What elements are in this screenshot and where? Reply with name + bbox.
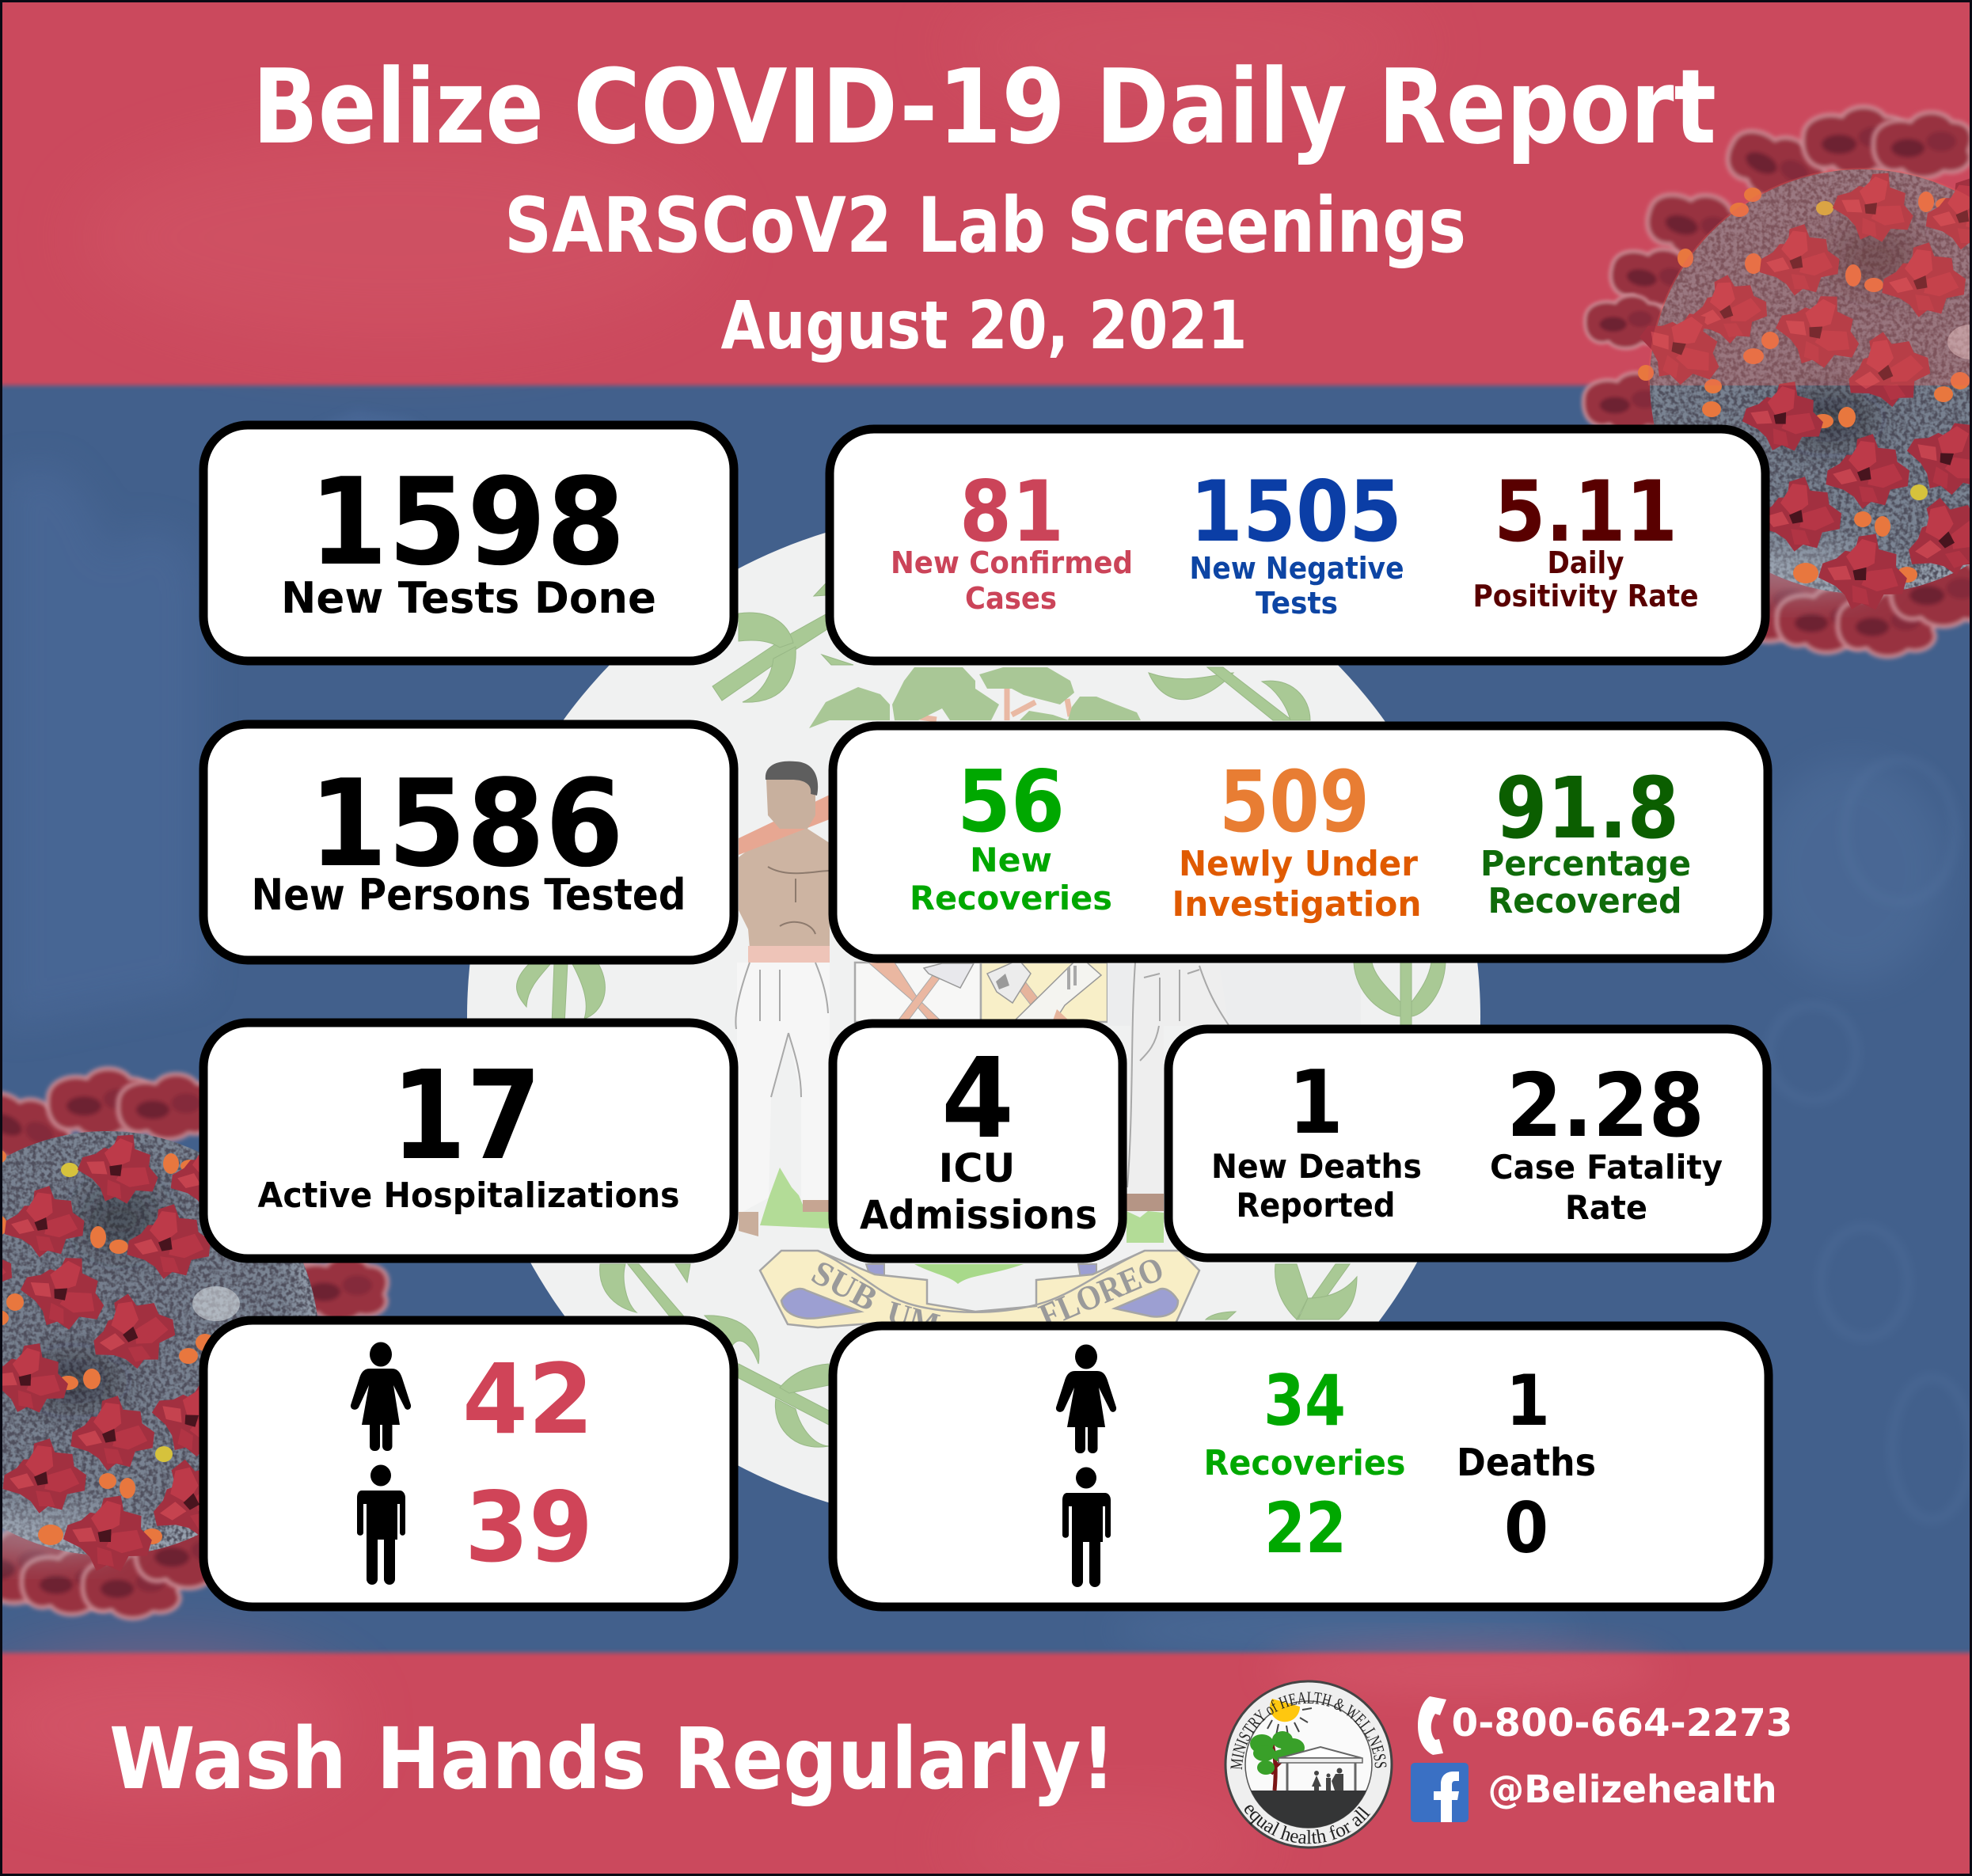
slogan <box>109 1711 1115 1809</box>
subtitle: Screenings <box>1067 181 1466 270</box>
title <box>253 47 1716 167</box>
icon: male <box>357 1464 405 1585</box>
value: 1586 <box>309 754 624 894</box>
positivity rate: Positivity Rate <box>1472 579 1699 613</box>
wreath leaves <box>516 583 1357 1447</box>
value: 1598 <box>309 452 625 592</box>
label: New Tests Done <box>281 573 656 623</box>
percentage recovered: 91.8 <box>1495 760 1679 858</box>
panel: ICU admissions <box>833 1023 1123 1259</box>
female count: 42 <box>462 1343 594 1456</box>
panel: new tests done <box>203 425 734 661</box>
panel: ICU admissions: Admissions <box>860 1192 1097 1238</box>
new recoveries: Recoveries <box>910 879 1112 917</box>
subtitle: Lab <box>918 181 1046 270</box>
confirmed cases <box>891 463 1133 616</box>
percentage recovered: Percentage <box>1480 844 1691 884</box>
value: 4 <box>941 1035 1014 1164</box>
seal family <box>1312 1768 1343 1791</box>
phone number: 0-800-664-2273 <box>1452 1701 1792 1745</box>
coronavirus image: upper right <box>1583 107 1972 657</box>
recoveries column <box>1203 1360 1406 1569</box>
label: Active Hospitalizations <box>258 1175 679 1216</box>
confirmed cases: 81 <box>959 463 1064 560</box>
slogan: Wash <box>109 1711 347 1809</box>
coat of arms <box>516 583 1446 1447</box>
new recoveries <box>910 753 1112 917</box>
confirmed cases: Cases <box>965 581 1057 616</box>
coronavirus image: lower left <box>0 1069 388 1619</box>
right supporter figure <box>1108 963 1361 1243</box>
case fatality: 2.28 <box>1507 1055 1704 1157</box>
seal tree <box>1250 1731 1305 1791</box>
under investigation: Newly Under <box>1179 844 1418 884</box>
positivity rate: 5.11 <box>1494 463 1678 560</box>
trees <box>809 667 1141 728</box>
seal sun <box>1267 1699 1312 1735</box>
title: Daily Report <box>1096 47 1716 167</box>
seal motto: equal health for all <box>1244 1805 1371 1844</box>
negative tests: 1505 <box>1190 463 1402 560</box>
title: COVID-19 <box>573 47 1066 167</box>
new recoveries: New <box>970 841 1052 879</box>
icon: female <box>351 1342 411 1451</box>
panel: recoveries and deaths by gender <box>833 1326 1769 1607</box>
motto ribbon: SUB <box>806 1252 883 1319</box>
confirmed cases: New Confirmed <box>891 545 1133 580</box>
case fatality: Case Fatality <box>1490 1148 1723 1187</box>
title: Belize <box>253 47 544 167</box>
under investigation: Investigation <box>1172 884 1422 925</box>
deaths column: 0 <box>1504 1487 1548 1569</box>
seal house <box>1279 1747 1362 1791</box>
logo: ministry of health seal <box>1224 1680 1393 1849</box>
subtitle <box>504 181 1466 270</box>
male count: 39 <box>465 1472 593 1584</box>
deaths column <box>1457 1360 1596 1569</box>
label: ICU <box>939 1145 1015 1191</box>
top red band <box>0 0 1972 385</box>
icon: facebook <box>1411 1763 1469 1822</box>
icon: phone <box>1418 1696 1446 1755</box>
label: New Persons Tested <box>252 870 686 920</box>
under investigation: 509 <box>1219 754 1370 852</box>
bottom red band <box>0 1646 1972 1876</box>
panel: new persons tested <box>203 724 734 960</box>
new deaths: New Deaths <box>1211 1147 1422 1186</box>
motto ribbon: UM <box>883 1293 944 1342</box>
crest shield <box>855 963 1108 1022</box>
seal ring text: MINISTRY of HEALTH & WELLNESS <box>1230 1692 1387 1770</box>
deaths column: 1 <box>1506 1360 1550 1441</box>
value: 17 <box>391 1044 541 1187</box>
new deaths <box>1211 1052 1422 1225</box>
under investigation <box>1172 754 1422 925</box>
negative tests: Tests <box>1256 586 1338 621</box>
panel: daily results <box>830 429 1765 661</box>
percentage recovered: Recovered <box>1488 881 1681 921</box>
panel: active hospitalizations <box>203 1023 734 1259</box>
new recoveries: 56 <box>957 753 1065 852</box>
deaths column: Deaths <box>1457 1441 1596 1485</box>
seal ground <box>1251 1791 1366 1828</box>
slogan: Regularly! <box>674 1711 1115 1809</box>
white flag circle <box>467 511 1480 1524</box>
case fatality: Rate <box>1565 1188 1647 1227</box>
new deaths: 1 <box>1288 1052 1343 1154</box>
recoveries column: Recoveries <box>1203 1443 1406 1483</box>
panel: confirmed cases by gender <box>203 1320 734 1607</box>
icon: male <box>1062 1468 1111 1587</box>
percentage recovered <box>1480 760 1691 921</box>
positivity rate <box>1472 463 1699 613</box>
case fatality <box>1490 1055 1723 1227</box>
slogan: Hands <box>377 1711 646 1809</box>
date: August 20, 2021 <box>720 287 1248 364</box>
left supporter figure <box>735 761 830 1236</box>
panel: recoveries and investigation <box>833 726 1768 959</box>
recoveries column: 22 <box>1264 1487 1347 1569</box>
new deaths: Reported <box>1237 1186 1395 1225</box>
negative tests <box>1189 463 1404 621</box>
motto ribbon: FLOREO <box>1034 1249 1169 1335</box>
right wreath leaf <box>1354 963 1446 1027</box>
negative tests: New Negative <box>1189 551 1404 586</box>
subtitle: SARSCoV2 <box>504 181 892 270</box>
motto ribbon <box>760 1249 1199 1342</box>
positivity rate: Daily <box>1547 545 1624 580</box>
icon: female <box>1056 1344 1116 1453</box>
facebook handle: @Belizehealth <box>1488 1768 1776 1812</box>
recoveries column: 34 <box>1263 1360 1346 1441</box>
panel: deaths and fatality <box>1168 1029 1767 1258</box>
